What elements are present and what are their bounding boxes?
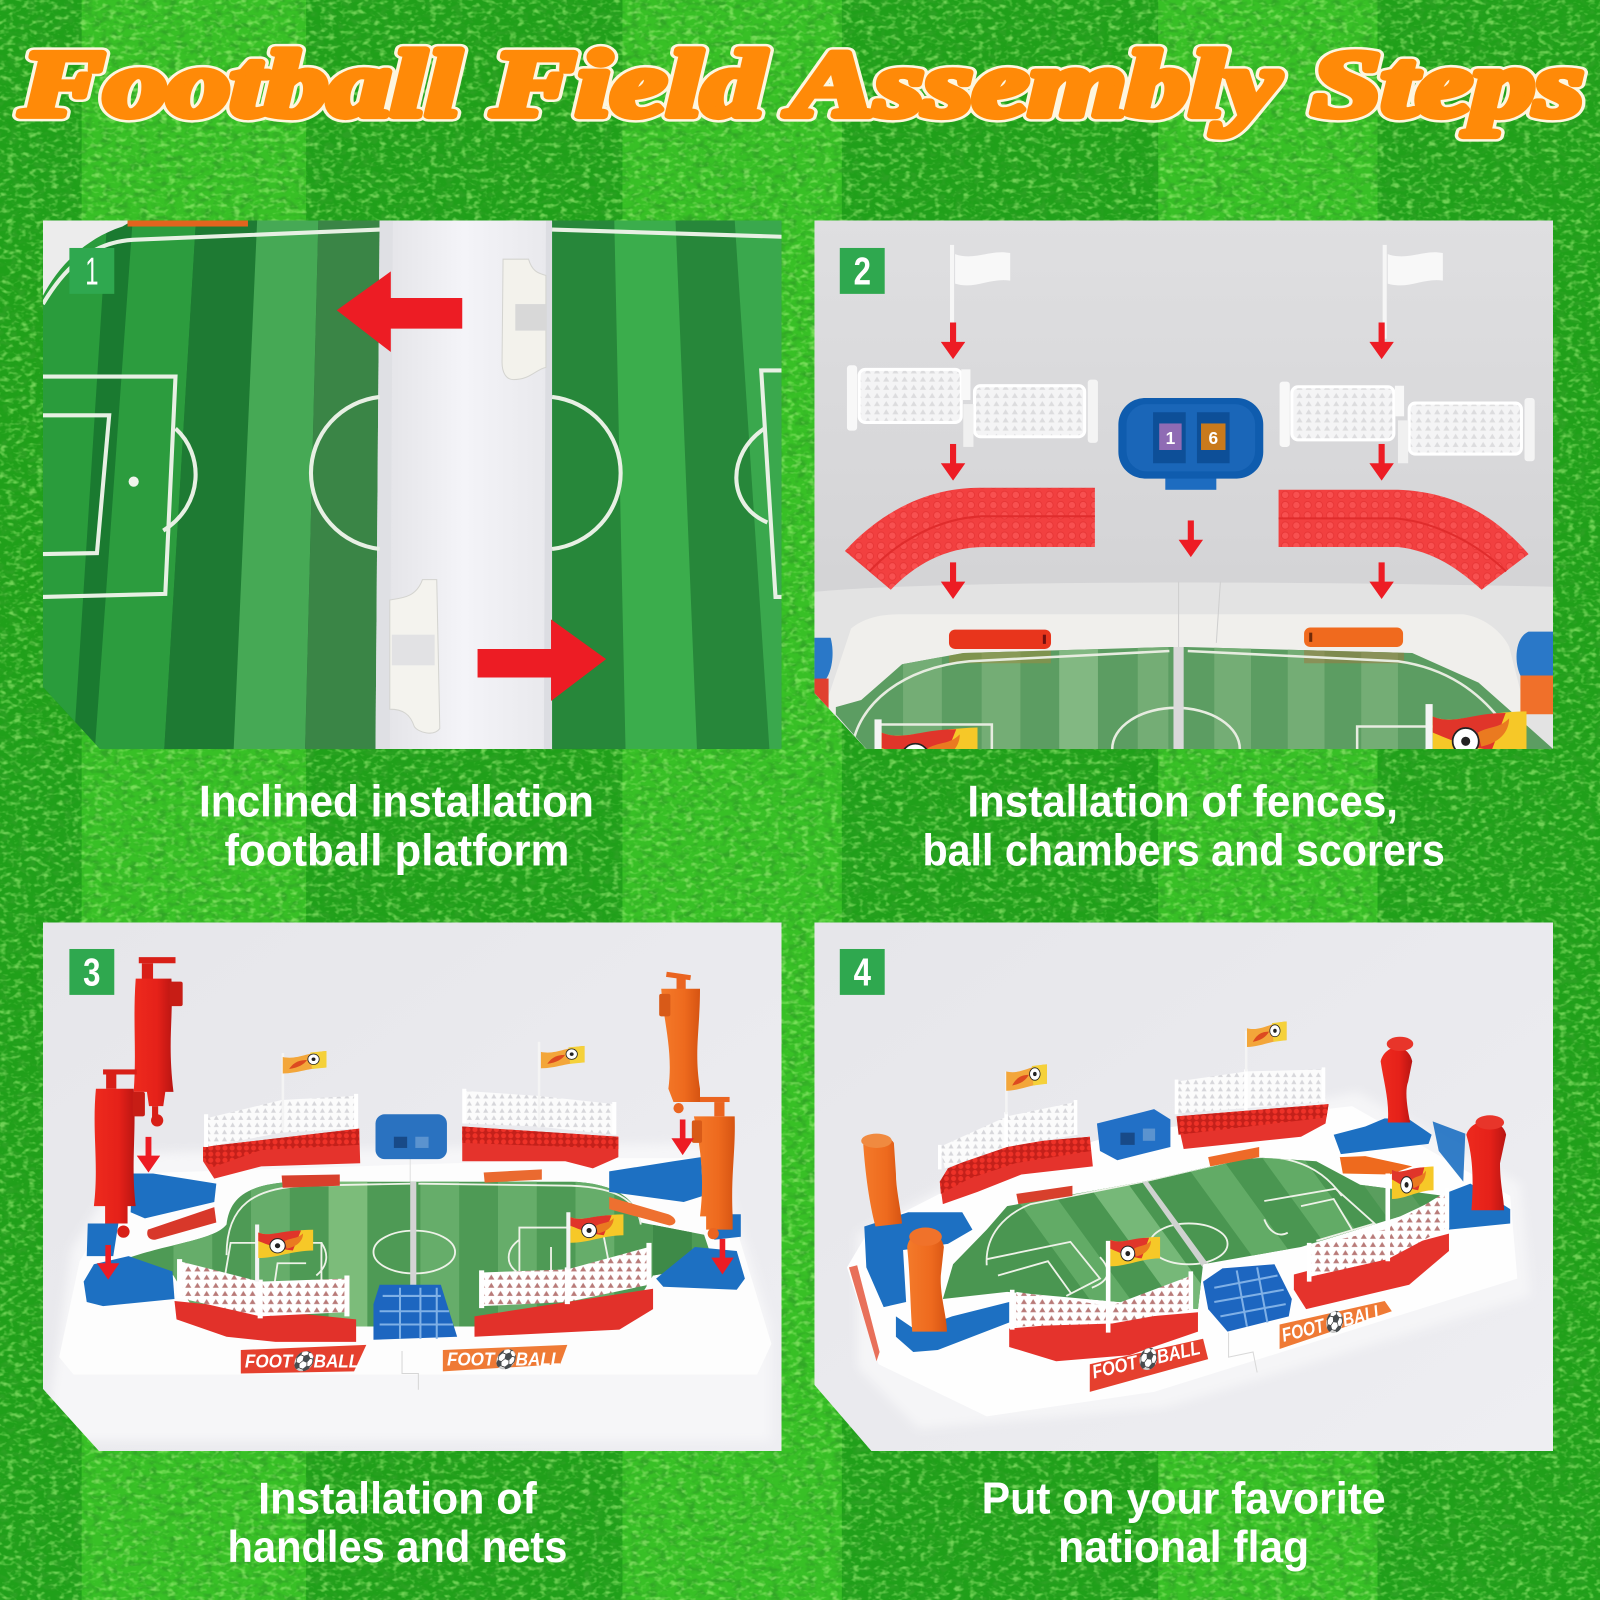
front left stand xyxy=(1009,1312,1198,1361)
rear left fence xyxy=(940,1100,1078,1169)
orange handle front xyxy=(907,1228,947,1332)
penalty spot xyxy=(129,477,139,487)
goal xyxy=(1203,1264,1292,1332)
red stand right xyxy=(1279,490,1529,590)
upper clip xyxy=(502,259,546,380)
white platform xyxy=(45,1143,771,1441)
panel: step 4 finished game xyxy=(814,922,1553,1451)
front left stand xyxy=(174,1301,356,1342)
white fences left xyxy=(847,365,1098,447)
front right stand xyxy=(474,1289,653,1337)
rear right fence xyxy=(464,1089,614,1135)
front left fence xyxy=(180,1259,347,1318)
orange handle rear xyxy=(659,972,700,1113)
title: Football Field Assembly Steps xyxy=(19,32,1584,136)
badge 4 xyxy=(840,949,885,995)
scoreboard: 1 xyxy=(1166,428,1176,448)
field xyxy=(934,1148,1500,1316)
front right fence xyxy=(482,1243,649,1308)
centre white strip xyxy=(376,220,552,749)
platform xyxy=(847,1092,1531,1429)
red arrows xyxy=(97,1119,734,1280)
orange strip xyxy=(128,220,248,227)
logo left: FOOT⚽BALL xyxy=(1090,1336,1202,1383)
orange handle rear xyxy=(861,1134,902,1227)
caption 2: Installation of fences, xyxy=(967,775,1398,826)
panel: step 2 parts xyxy=(814,220,1553,779)
goal xyxy=(373,1285,457,1340)
caption 2: ball chambers and scorers xyxy=(922,824,1445,875)
rear flags xyxy=(282,1042,585,1131)
arrow: right xyxy=(478,619,606,701)
field xyxy=(122,1173,735,1332)
caption 3: Installation of xyxy=(258,1472,538,1523)
blue mounts xyxy=(84,1157,745,1306)
rear right stand xyxy=(462,1127,618,1168)
rear left stand xyxy=(940,1137,1093,1204)
front right fence xyxy=(1309,1173,1449,1282)
logo right: FOOT⚽BALL xyxy=(1279,1299,1386,1347)
caption 1 xyxy=(199,775,594,875)
rear right fence xyxy=(1177,1067,1326,1114)
red stand left xyxy=(845,488,1095,590)
badge 1 xyxy=(69,248,114,294)
logo right: FOOT⚽BALL xyxy=(447,1348,561,1370)
scoreboard xyxy=(376,1114,447,1159)
caption 3 xyxy=(228,1472,567,1572)
red handle rear xyxy=(1381,1037,1413,1122)
caption 2 xyxy=(922,775,1445,875)
scoreboard xyxy=(1097,1109,1170,1160)
red paddle xyxy=(949,630,1051,649)
badge 1: 1 xyxy=(85,251,98,294)
badge 2: 2 xyxy=(854,251,871,294)
left field stripes xyxy=(43,220,382,749)
field xyxy=(836,647,1553,749)
white flags xyxy=(950,245,1010,322)
front left fence xyxy=(1012,1241,1193,1333)
orange handle front xyxy=(692,1097,735,1239)
front right stand xyxy=(1294,1234,1449,1309)
rear paddles xyxy=(282,1169,542,1188)
paddles xyxy=(1016,1147,1412,1204)
caption 4: national flag xyxy=(1058,1521,1309,1572)
flags on field xyxy=(874,719,978,749)
lower clip xyxy=(390,580,440,733)
scoreboard xyxy=(1118,398,1263,490)
caption 4 xyxy=(982,1472,1386,1572)
right field stripes xyxy=(552,220,782,749)
white fences right xyxy=(1280,382,1535,463)
logo left: FOOT⚽BALL xyxy=(245,1350,359,1372)
blue mounts xyxy=(864,1118,1510,1352)
panel: step 1 field halves xyxy=(43,220,782,749)
badge 4: 4 xyxy=(854,952,871,995)
red handle front xyxy=(1466,1115,1506,1210)
field markings xyxy=(43,230,782,597)
caption 3: handles and nets xyxy=(228,1521,567,1572)
red handle rear xyxy=(134,957,183,1127)
badge 3 xyxy=(69,949,114,995)
badge 3: 3 xyxy=(83,952,101,995)
base platform xyxy=(814,582,1553,749)
caption 1: football platform xyxy=(224,824,569,875)
rear left stand xyxy=(203,1129,360,1179)
left handle stub xyxy=(814,638,833,709)
title: Football Field Assembly Steps xyxy=(19,32,1584,136)
arrow: left xyxy=(337,271,462,352)
front flags xyxy=(1110,1166,1434,1266)
panel: step 3 handles and nets xyxy=(43,922,782,1451)
scoreboard: 6 xyxy=(1208,428,1218,448)
side paddles xyxy=(147,1197,675,1240)
caption 4: Put on your favorite xyxy=(982,1472,1386,1523)
front flags xyxy=(255,1212,623,1282)
caption 1: Inclined installation xyxy=(199,775,594,826)
right handle stub xyxy=(1517,632,1553,714)
side sticker xyxy=(849,1265,880,1361)
rear right stand xyxy=(1177,1104,1329,1149)
orange paddle xyxy=(1304,628,1403,647)
rear flags xyxy=(1005,1021,1287,1114)
top-left corner of platform xyxy=(43,220,133,296)
down arrows xyxy=(941,322,1394,599)
rear left fence xyxy=(206,1094,356,1147)
red handle front xyxy=(94,1069,145,1238)
badge 2 xyxy=(840,248,885,294)
